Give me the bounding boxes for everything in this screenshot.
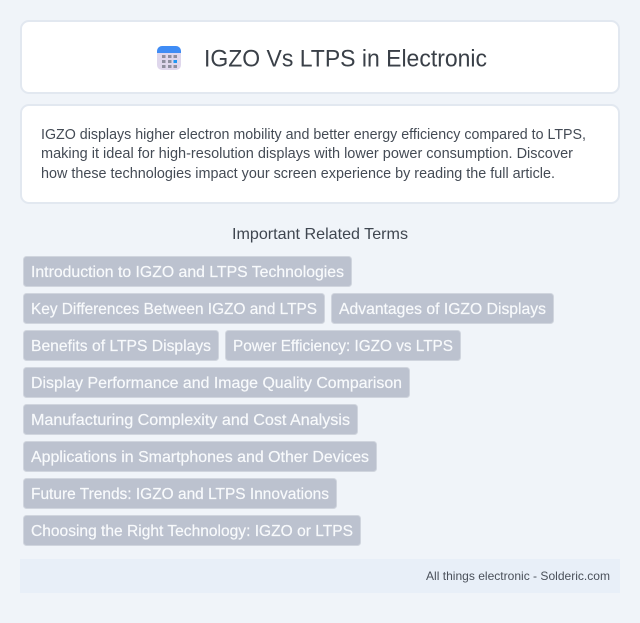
chip: future trends: Future Trends: IGZO and LTPS Innovations xyxy=(31,486,329,503)
chip: advantages xyxy=(332,294,554,324)
text block: description: how these technologies impact your screen experience by reading the full article. xyxy=(41,166,555,182)
icon: calendar grid xyxy=(157,46,181,70)
chip: key differences: Key Differences Between IGZO and LTPS xyxy=(31,301,317,318)
chip: display performance: Display Performance and Image Quality Comparison xyxy=(31,375,402,392)
chip: key differences xyxy=(24,294,324,324)
chip: power efficiency xyxy=(226,330,460,360)
heading: related terms: Important Related Terms xyxy=(232,226,408,243)
chip: introduction: Introduction to IGZO and LTPS Technologies xyxy=(31,264,344,281)
chip: choosing xyxy=(24,516,360,546)
title: IGZO Vs LTPS in Electronic xyxy=(204,46,487,72)
chip: power efficiency: Power Efficiency: IGZO vs LTPS xyxy=(233,338,453,355)
text block: description: IGZO displays higher electron mobility and better energy efficiency compared to LTPS, xyxy=(41,127,586,143)
chip: applications: Applications in Smartphones and Other Devices xyxy=(31,449,369,466)
chip: display performance xyxy=(24,368,410,398)
chip: future trends xyxy=(24,478,336,508)
panel: title header xyxy=(21,21,619,93)
chip: manufacturing xyxy=(24,404,358,434)
footer: All things electronic - Solderic.com xyxy=(426,569,610,583)
footer xyxy=(20,559,620,593)
chip: manufacturing: Manufacturing Complexity and Cost Analysis xyxy=(31,412,350,429)
chip: choosing: Choosing the Right Technology: IGZO or LTPS xyxy=(31,523,353,540)
chip: benefits xyxy=(24,330,218,360)
chip: benefits: Benefits of LTPS Displays xyxy=(31,338,211,355)
panel: description xyxy=(21,105,619,203)
text block: description: making it ideal for high-resolution displays with lower power consumption. Discover xyxy=(41,146,573,162)
chip: introduction xyxy=(24,256,352,286)
chip: applications xyxy=(24,442,376,472)
term chips xyxy=(24,256,554,546)
chip: advantages: Advantages of IGZO Displays xyxy=(339,301,546,318)
text block: description xyxy=(41,127,586,182)
